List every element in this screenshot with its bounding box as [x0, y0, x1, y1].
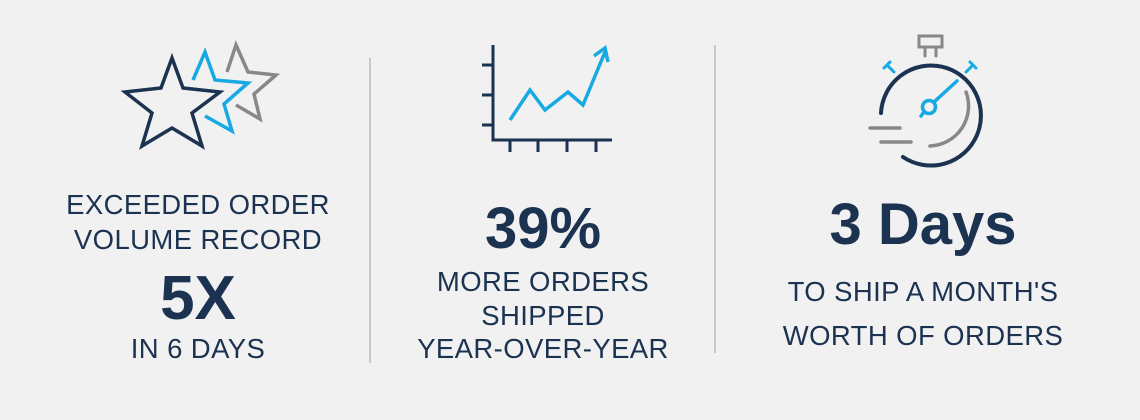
- number 3 Days: 3 Days: [829, 192, 1017, 257]
- label: SHIPPED: [481, 300, 605, 330]
- number 5X: 5X: [160, 264, 236, 333]
- label top: EXCEEDED ORDER: [66, 189, 330, 220]
- label: [782, 276, 1063, 351]
- label: [417, 266, 669, 364]
- icon: stars group: [125, 45, 276, 146]
- label: YEAR-OVER-YEAR: [417, 333, 669, 364]
- divider 1: [369, 58, 371, 363]
- text: column 2: [417, 196, 669, 364]
- divider 2: [714, 45, 716, 353]
- text: column 3: [782, 192, 1063, 351]
- label top: VOLUME RECORD: [74, 224, 322, 255]
- text: column 1: [66, 189, 330, 364]
- label top: [66, 189, 330, 255]
- label: MORE ORDERS: [437, 266, 649, 297]
- label: WORTH OF ORDERS: [783, 320, 1063, 351]
- number 39%: 39%: [485, 196, 601, 261]
- label bottom: IN 6 DAYS: [131, 333, 265, 364]
- label: TO SHIP A MONTH'S: [788, 276, 1058, 307]
